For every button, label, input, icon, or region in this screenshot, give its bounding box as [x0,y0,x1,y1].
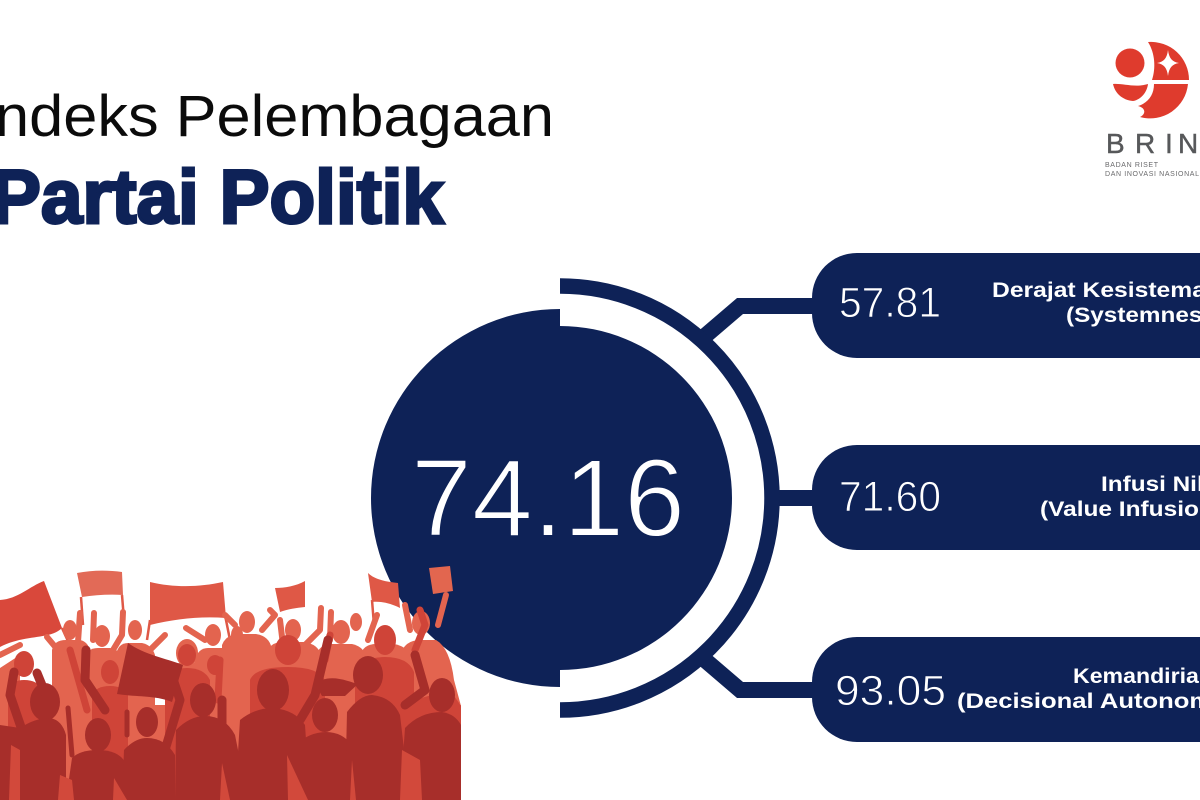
back crowd layer [0,595,461,800]
pill: Infusi Nilai [812,445,1200,550]
logo subtitle: DAN INOVASI NASIONAL [1105,171,1199,178]
main circle [371,309,732,687]
icon: BRIN emblem [1113,42,1189,118]
connectors [705,306,830,690]
logo subtitle [1105,162,1199,178]
middle crowd layer [8,610,461,800]
pill: Kemandirian [812,637,1200,742]
logo wordmark: BRIN [1106,128,1198,159]
front crowd layer [0,640,461,800]
title [0,84,554,240]
main value: 74.16 [411,437,685,560]
pill: Derajat Kesisteman [812,253,1200,358]
label: Derajat Kesisteman [992,278,1200,302]
title line: Partai Politik: Partai Politik [0,155,445,240]
value 57.81: 57.81 [839,279,941,327]
label: (Decisional Autonomy) [957,689,1200,713]
logo subtitle: BADAN RISET [1105,162,1159,169]
flags and signs [0,566,453,650]
illustration: crowd [0,566,461,800]
value 93.05: 93.05 [835,667,946,715]
label [1040,472,1200,521]
value 71.60: 71.60 [839,473,941,521]
outer arc [560,286,772,710]
label: (Value Infusion) [1040,497,1200,521]
label [992,278,1200,327]
logo: BRIN [1105,42,1199,178]
highlight stripes [9,745,422,800]
label: Kemandirian [1073,664,1200,688]
label [957,664,1200,713]
